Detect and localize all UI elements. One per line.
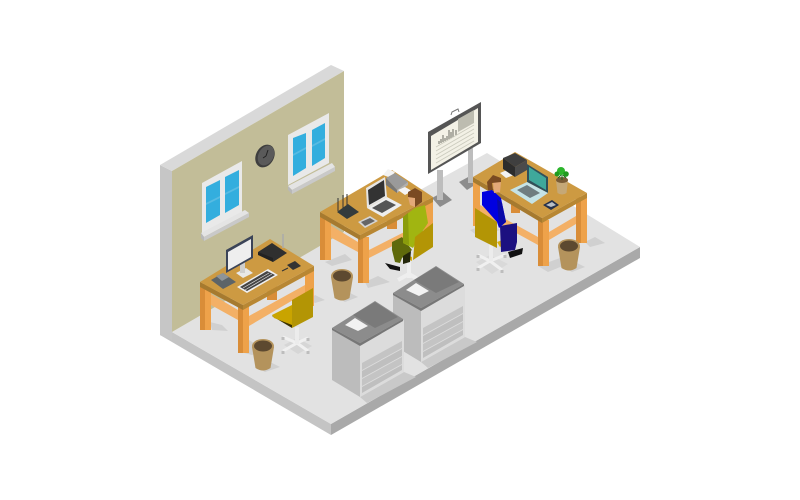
wall clock [251,141,279,171]
floor slab [160,153,640,435]
waste bin left [252,339,280,372]
chair 2 base and seat [393,250,421,281]
printer on desk 3 [500,153,527,178]
whiteboard on stands [428,102,481,207]
tablet on desk 2 [358,216,378,228]
back wall [160,65,344,340]
potted plant [554,167,569,194]
keyboard on desk 1 [237,269,278,293]
printer on desk 2 [383,169,412,195]
monitor on desk 1 [226,235,253,278]
calculator on desk 3 [543,200,559,210]
person in green [385,188,428,271]
window left [201,161,249,241]
copier front [332,301,416,403]
desk 3 back right [470,152,605,272]
router on desk 2 [337,194,359,219]
copier back [393,266,477,368]
chair 1 [272,288,313,354]
person in blue [482,175,523,258]
waste bin right [558,239,585,272]
chair 2 back [413,223,433,260]
laptop on desk 2 [366,177,402,217]
desk phone [211,273,236,289]
desk 2 center [320,170,433,288]
desk 1 front left [200,239,325,355]
waste bin center [331,269,358,302]
chair 3 base and seat [476,235,516,274]
laptop on desk 3 [510,164,548,204]
chair 3 back [475,208,497,248]
router on desk 1 [258,234,287,262]
small device on desk 1 [282,261,301,271]
window right [288,113,335,194]
